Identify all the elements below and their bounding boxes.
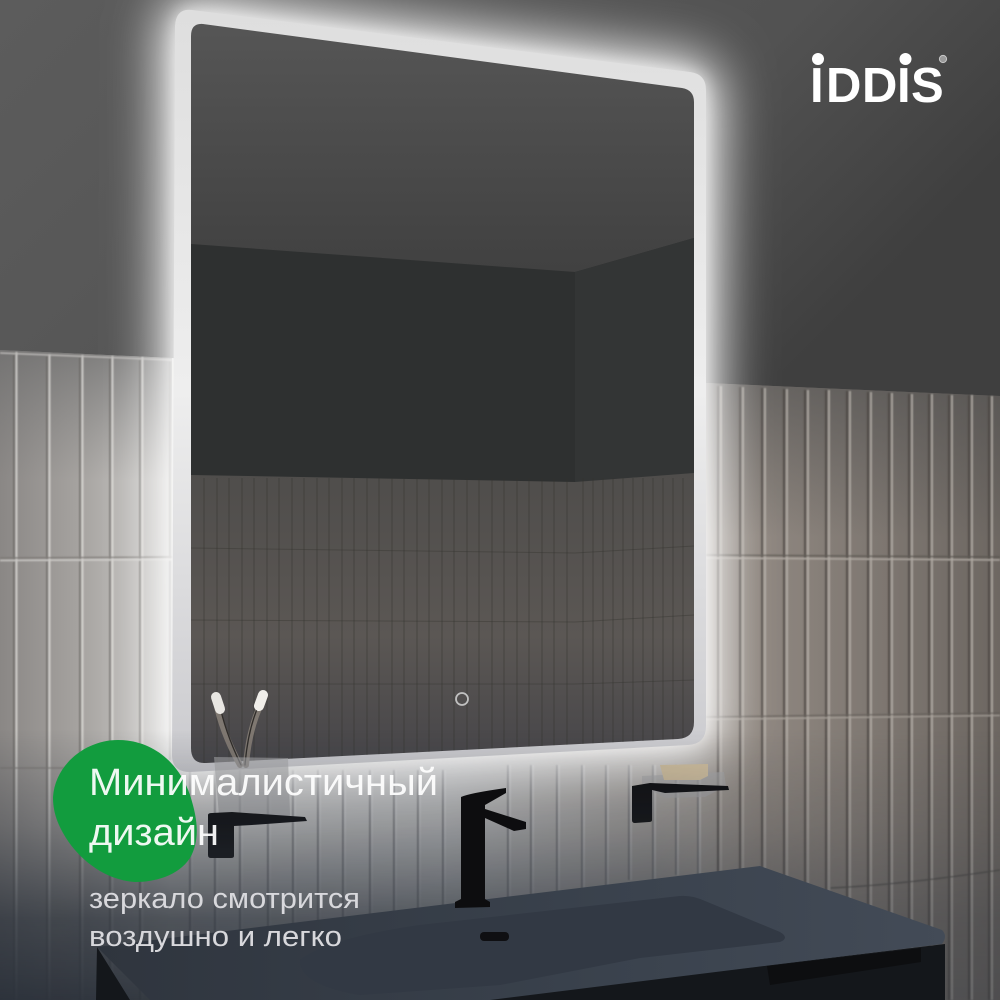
soap dish	[632, 764, 729, 823]
heading	[89, 762, 438, 854]
black bracket	[632, 783, 729, 823]
drain	[480, 932, 509, 941]
subheading: воздушно и легко	[89, 921, 342, 953]
mirror	[172, 10, 706, 772]
basin	[300, 896, 785, 995]
logo: iddis: IDDIS	[810, 59, 944, 113]
tile joints: left wall	[0, 352, 172, 1000]
black shelf bracket	[208, 812, 307, 858]
toothbrushes	[216, 695, 263, 765]
tiled wall	[0, 350, 1000, 1000]
tile joints: under mirror	[190, 765, 700, 1000]
mirror glass reflection	[185, 20, 700, 770]
heading: дизайн	[89, 812, 219, 854]
glass cup	[214, 757, 290, 822]
cabinet	[96, 944, 945, 1000]
cabinet handle recess	[767, 948, 921, 985]
plaster wall	[0, 0, 1000, 400]
tile joints: right wall	[706, 386, 1000, 1000]
subheading: зеркало смотрится	[89, 883, 360, 915]
heading: Минималистичный	[89, 762, 438, 804]
fade overlay	[0, 730, 1000, 1000]
mirror frame	[172, 10, 706, 772]
green blob	[53, 740, 197, 882]
countertop	[96, 866, 945, 1000]
mirror backlight glow	[172, 10, 706, 772]
black faucet	[455, 788, 526, 908]
soap	[660, 764, 708, 780]
toothbrush holder	[208, 695, 307, 858]
touch button	[456, 693, 468, 705]
counter surface	[97, 866, 945, 1000]
subheading	[89, 883, 360, 953]
glass dish	[642, 772, 726, 798]
